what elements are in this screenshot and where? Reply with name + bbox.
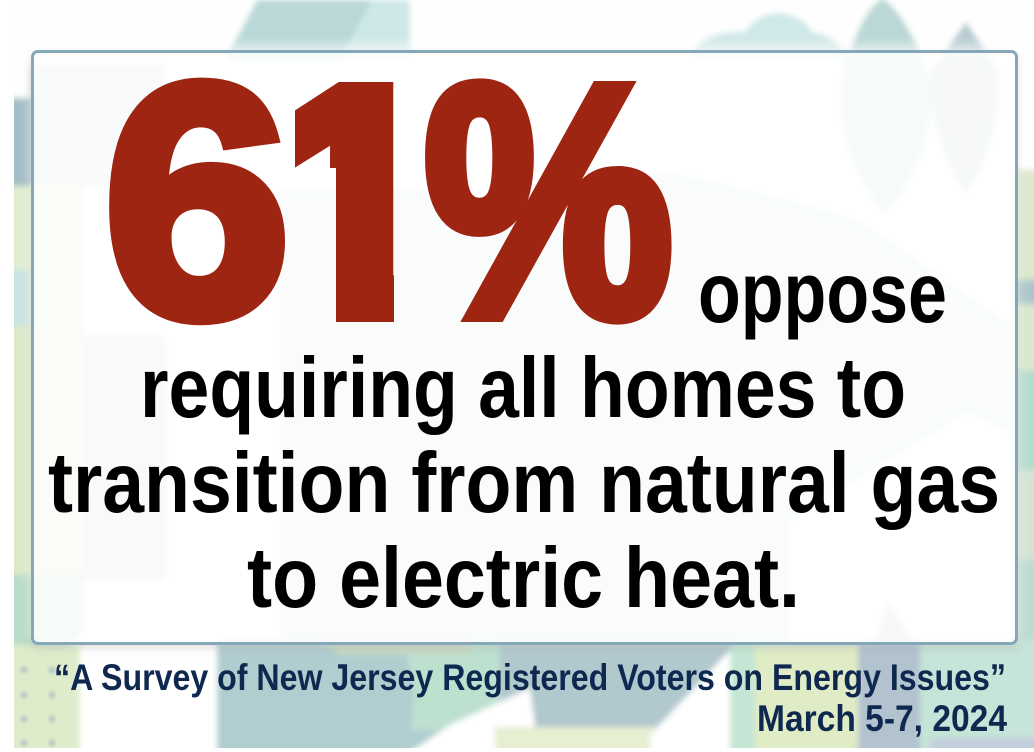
source date: March 5-7, 2024 — [757, 698, 1007, 739]
bottom band — [14, 642, 82, 748]
statement line 2: requiring all homes to — [140, 341, 906, 436]
panel interior shapes — [84, 335, 166, 580]
house and roof at top — [229, 0, 374, 55]
big statistic — [109, 78, 672, 326]
right strip — [1018, 168, 1034, 283]
left strip — [28, 65, 31, 100]
statement line 4: to electric heat. — [247, 531, 800, 626]
dots pattern — [20, 666, 56, 746]
main panel — [31, 50, 1018, 645]
big statistic: % — [424, 16, 673, 385]
big statistic: 6 — [104, 16, 290, 385]
statement line 1: oppose — [698, 246, 947, 341]
clouds and trees at top right — [695, 11, 843, 50]
big statistic: 1 — [262, 19, 446, 388]
